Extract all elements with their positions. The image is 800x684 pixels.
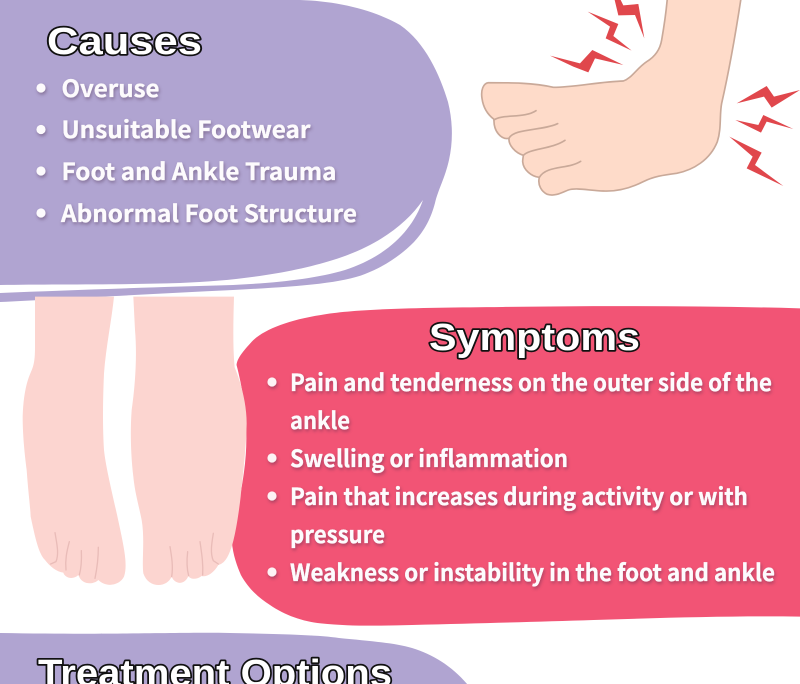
illustration: pair of feet [23,297,247,585]
white swoosh [0,200,423,293]
causes list: Foot and Ankle Trauma [62,153,337,187]
right foot [131,297,247,585]
symptoms list [267,364,775,588]
left foot [23,297,126,585]
symptoms list: Pain and tenderness on the outer side of the [290,364,772,398]
symptoms list: Swelling or inflammation [290,440,568,474]
pain bolts [550,0,800,186]
panel: causes [0,0,452,302]
causes list: Unsuitable Footwear [62,111,311,145]
illustration: injured foot with pain bolts [482,0,800,195]
causes list [36,70,357,229]
heading: causes: Causes [47,21,202,63]
toe lines [494,111,581,177]
symptoms list: ankle [290,402,350,436]
symptoms list: pressure [290,516,385,550]
symptoms list: Weakness or instability in the foot and ankle [290,554,775,588]
causes list: Overuse [62,70,160,104]
foot [482,0,741,195]
panel: treatment options [0,633,472,684]
causes list: Abnormal Foot Structure [60,195,357,229]
heading: symptoms: Symptoms [429,317,640,359]
symptoms list: Pain that increases during activity or with [290,478,748,512]
panel: symptoms [232,306,800,626]
toe creases [51,533,218,578]
